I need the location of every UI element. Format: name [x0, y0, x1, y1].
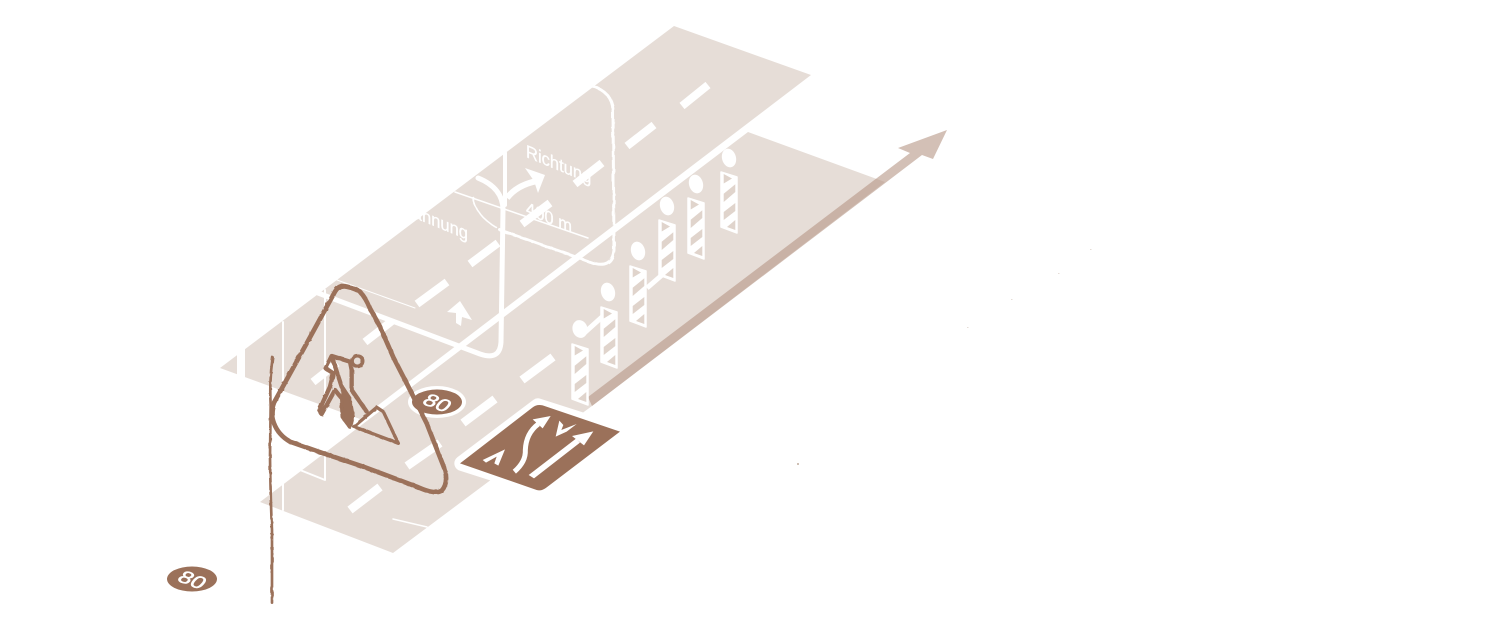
icon: exit arrow — [507, 168, 545, 198]
white vertical post band — [237, 345, 245, 380]
worker leg — [342, 387, 353, 427]
panel: lower road section — [260, 132, 885, 553]
barricade 2 — [688, 198, 704, 259]
barricade 1 — [721, 172, 737, 233]
icon: hand drawn road works sign — [270, 286, 446, 603]
sign gantry outlines — [283, 86, 614, 527]
worker head — [352, 356, 363, 366]
sign pole — [270, 357, 273, 603]
panel: upper road section — [220, 26, 811, 419]
sign arrows — [483, 416, 593, 478]
distance text: 400 m: 400 m — [526, 198, 572, 237]
road marking sign: lane shift — [460, 405, 620, 490]
speed legend 80: 80 — [173, 567, 212, 593]
arrow: road direction — [588, 130, 947, 406]
barricade 6 — [572, 344, 588, 405]
sign triangle — [272, 286, 446, 492]
barricade 4 — [630, 266, 646, 327]
lane dashes lower road — [350, 357, 553, 510]
barricades — [570, 147, 738, 405]
direction text: Spannung: Spannung — [393, 193, 468, 244]
barricade 3 — [659, 220, 675, 281]
worker body — [319, 356, 367, 427]
faint specks — [797, 249, 1092, 465]
speed marking 80 on road: 80 — [418, 390, 457, 416]
sand heap — [354, 407, 398, 443]
direction text: Richtung: Richtung — [526, 141, 591, 188]
barricade 5 — [601, 307, 617, 368]
connector lines — [582, 275, 662, 335]
speed marking 80 on road — [408, 386, 466, 418]
warning lights — [570, 147, 738, 340]
lane dashes upper road — [313, 85, 708, 382]
icon: straight arrow — [447, 301, 472, 326]
